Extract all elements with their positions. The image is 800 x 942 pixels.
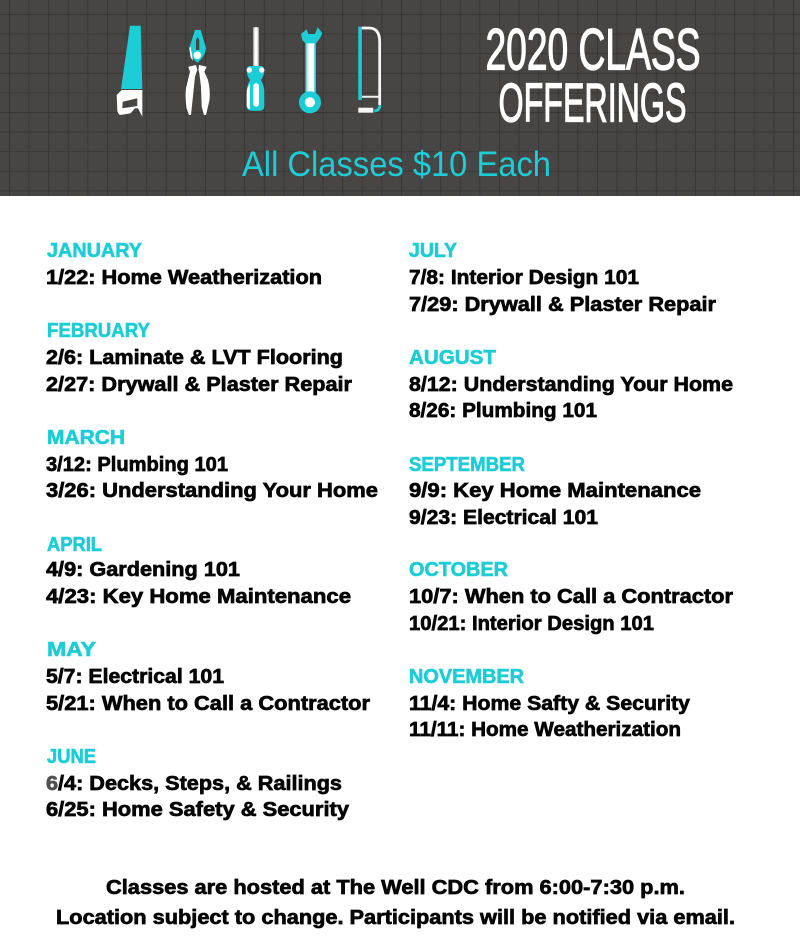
month: January: 1/22: Home Weatherization	[46, 267, 322, 289]
panel: left column of classes	[46, 240, 378, 821]
month: August: 8/26: Plumbing 101	[409, 400, 597, 422]
month: August: AUGUST	[409, 347, 496, 369]
month: November: 11/11: Home Weatherization	[409, 719, 681, 741]
icon: pliers	[186, 30, 210, 115]
footer note: Classes are hosted at The Well CDC from 6:00-7:30 p.m.	[106, 877, 685, 899]
subtitle: All Classes $10 Each	[242, 145, 551, 184]
month: September: SEPTEMBER	[409, 454, 526, 476]
month: October: 10/7: When to Call a Contractor	[409, 586, 733, 608]
footer note: Location subject to change. Participants will be notified via email.	[56, 907, 735, 929]
panel: right column of classes	[409, 240, 733, 741]
month: May: 5/21: When to Call a Contractor	[46, 693, 370, 715]
month: April: APRIL	[47, 534, 102, 556]
month: March: 3/26: Understanding Your Home	[46, 480, 378, 502]
month: May: MAY	[47, 639, 97, 661]
month: January	[46, 240, 322, 289]
month: February: FEBRUARY	[47, 320, 151, 342]
month: February	[46, 320, 352, 396]
icon: hand saw	[117, 26, 142, 117]
month: July: 7/8: Interior Design 101	[409, 267, 639, 289]
month: March	[46, 427, 378, 502]
month: October	[409, 559, 733, 635]
month: February: 2/27: Drywall & Plaster Repair	[46, 374, 352, 396]
month: November	[409, 666, 691, 741]
month: April	[46, 534, 351, 608]
month: June: 6/4: Decks, Steps, & Railings	[46, 773, 342, 795]
month: June: JUNE	[47, 746, 96, 768]
month: July: 7/29: Drywall & Plaster Repair	[409, 294, 716, 316]
icon: wrench	[299, 27, 322, 113]
month: March: 3/12: Plumbing 101	[46, 454, 228, 476]
header panel	[0, 0, 800, 196]
month: April: 4/23: Key Home Maintenance	[46, 586, 351, 608]
month: May	[46, 639, 370, 715]
month: November: 11/4: Home Safty & Security	[409, 693, 691, 715]
month: August: 8/12: Understanding Your Home	[409, 374, 733, 396]
month: June	[46, 746, 350, 821]
month: March: MARCH	[47, 427, 125, 449]
month: February: 2/6: Laminate & LVT Flooring	[46, 347, 343, 369]
title	[486, 18, 700, 134]
month: September: 9/23: Electrical 101	[409, 507, 598, 529]
month: November: NOVEMBER	[409, 666, 525, 688]
month: September: 9/9: Key Home Maintenance	[409, 480, 701, 502]
month: July	[409, 240, 716, 316]
month: October: OCTOBER	[409, 559, 509, 581]
month: October: 10/21: Interior Design 101	[409, 613, 654, 635]
month: August	[409, 347, 733, 422]
month: September	[409, 454, 701, 529]
icon: hacksaw	[358, 27, 380, 113]
icon: screwdriver	[247, 27, 264, 111]
month: January: JANUARY	[47, 240, 143, 262]
month: July: JULY	[409, 240, 458, 262]
month: June: 6/25: Home Safety & Security	[46, 799, 350, 821]
month: April: 4/9: Gardening 101	[46, 559, 240, 581]
footer note	[56, 877, 735, 929]
month: May: 5/7: Electrical 101	[46, 666, 224, 688]
